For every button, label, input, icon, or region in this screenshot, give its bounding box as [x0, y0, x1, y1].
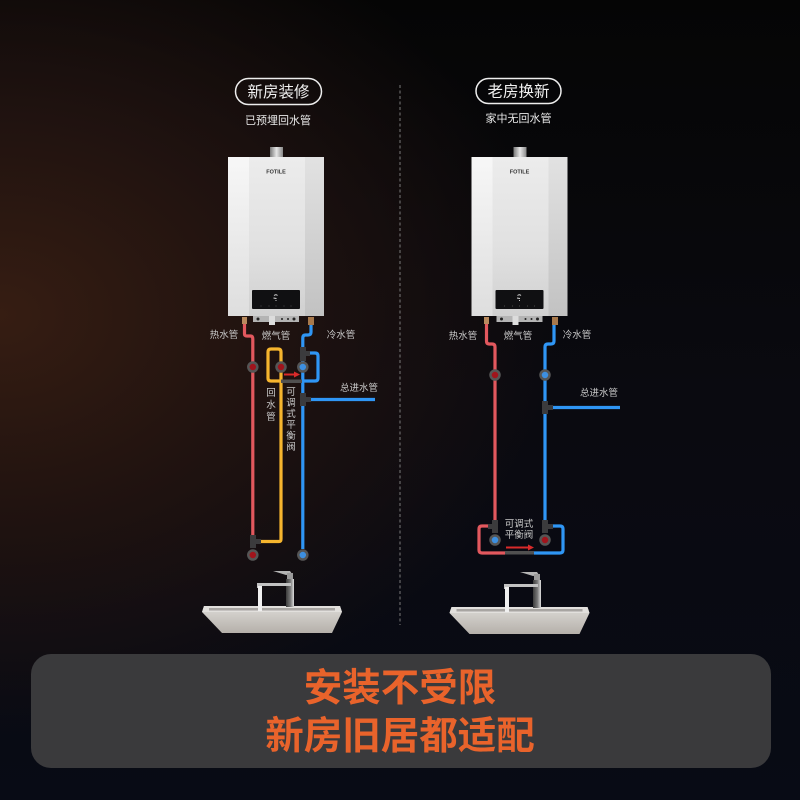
sink and faucet right: [450, 572, 590, 634]
callout banner: [31, 654, 771, 768]
fittings left: [250, 347, 311, 548]
cold bypass: [534, 526, 563, 553]
valve circles left: [248, 362, 307, 560]
pipe fittings right: [484, 317, 558, 325]
labels left: 燃气管: [262, 330, 290, 342]
labels left: 式: [286, 408, 296, 420]
sink and faucet left: [202, 571, 342, 633]
labels left: 总进水管: [340, 382, 378, 394]
labels right: 总进水管: [580, 387, 618, 399]
panel: new house: [202, 78, 378, 633]
main inlet pipe right: [552, 406, 620, 409]
main inlet pipe left: [310, 398, 375, 401]
labels left: 冷水管: [327, 329, 355, 341]
labels left: 热水管: [210, 329, 238, 341]
labels left: 可: [286, 387, 296, 398]
balance valve left: [281, 380, 302, 383]
cold water pipe left: [303, 325, 311, 549]
labels right: 平衡阀: [505, 529, 533, 541]
cold bypass loop: [303, 353, 318, 381]
labels left: 管: [266, 411, 276, 423]
fittings right: [488, 401, 553, 533]
arrow right: [506, 544, 534, 550]
hot water pipe left: [244, 324, 253, 537]
valve circles right: [490, 370, 550, 544]
labels left: 回: [266, 388, 276, 399]
hot water pipe right: [486, 324, 495, 524]
labels left: 衡: [286, 430, 296, 442]
arrow left: [284, 372, 300, 378]
callout banner: 安装不受限: [304, 667, 496, 710]
cold water pipe right: [545, 325, 554, 524]
heading pill: new house: [236, 78, 322, 104]
heading pill: new house: 新房装修: [247, 83, 310, 101]
balance valve right: [505, 551, 534, 554]
labels right: 燃气管: [504, 330, 532, 342]
pipe fittings left: [242, 317, 314, 325]
center divider: [399, 85, 401, 625]
labels right: [449, 329, 618, 541]
heading pill: old house: [476, 78, 561, 104]
subheading: new house: 已预埋回水管: [245, 113, 311, 127]
labels left: 水: [266, 399, 276, 411]
callout banner: 新房旧居都适配: [265, 715, 535, 758]
hot bypass: [479, 526, 505, 553]
labels left: [210, 329, 378, 453]
water heater left: [228, 147, 324, 325]
labels right: 冷水管: [563, 329, 591, 341]
labels left: 阀: [286, 441, 296, 453]
labels left: 平: [286, 420, 296, 431]
labels right: 热水管: [449, 330, 477, 342]
subheading: old house: 家中无回水管: [486, 111, 552, 125]
labels right: 可调式: [505, 518, 534, 530]
labels left: 调: [286, 398, 296, 409]
water heater right: [472, 147, 568, 325]
panel: old house: [449, 78, 620, 634]
heading pill: old house: 老房换新: [487, 82, 550, 100]
return water pipe: [259, 349, 281, 542]
